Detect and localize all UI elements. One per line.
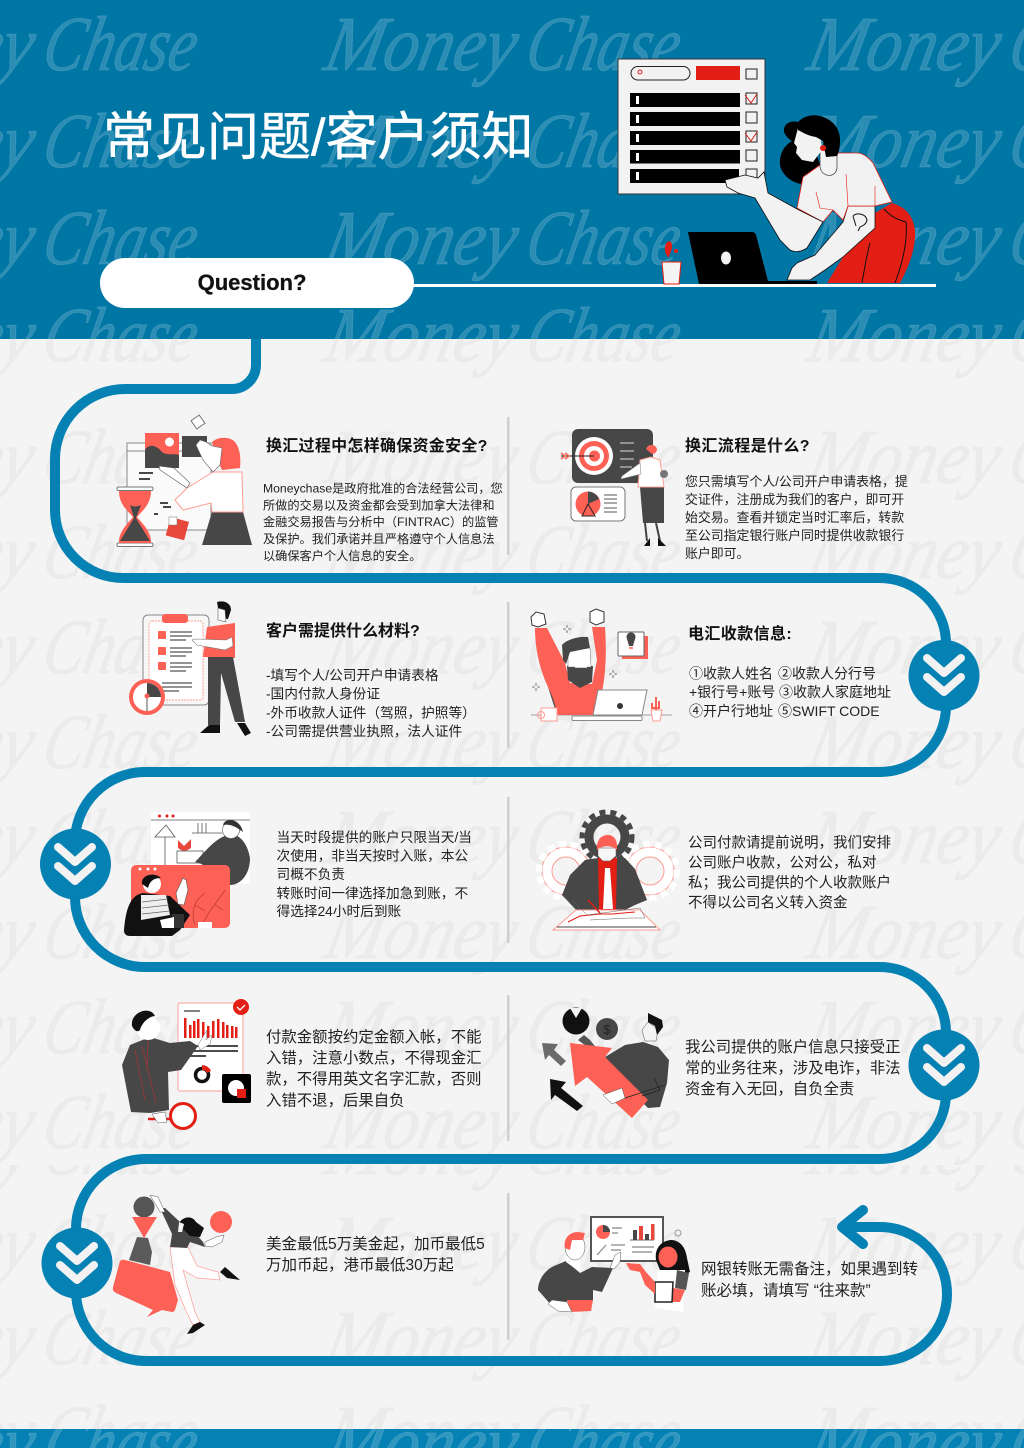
body text: 账户即可。 [685, 546, 749, 561]
body text: -填写个人/公司开户申请表格 [266, 667, 439, 683]
panel: exchange process [561, 429, 908, 561]
illustration: man presenting report with magnifier [122, 999, 251, 1128]
laptop [688, 232, 817, 284]
body text: 网银转账无需备注，如果遇到转 [701, 1260, 918, 1278]
panel: company payment [539, 812, 891, 930]
body text: ③收款人家庭地址 [779, 684, 891, 700]
body text: 交证件，注册成为我们的客户，即可开 [685, 492, 904, 507]
panel: minimum amounts [113, 1195, 485, 1334]
body text: 您只需填写个人/公司开户申请表格，提 [685, 474, 908, 489]
panel: legal business [542, 1008, 900, 1118]
body text: 司概不负责 [276, 867, 345, 882]
winding timeline path [55, 339, 947, 1361]
hair back [780, 121, 820, 184]
panel: same-day account [124, 812, 472, 936]
column dividers [507, 417, 510, 1340]
illustration: target board and presenter [561, 429, 668, 546]
header baseline [410, 284, 936, 287]
body text: +银行号+账号 [689, 684, 775, 700]
body text: -公司需提供营业执照，法人证件 [266, 724, 462, 739]
question pill [100, 258, 414, 308]
body text: -国内付款人身份证 [266, 686, 380, 702]
body text: 所做的交易以及资金都会受到加拿大法律和 [263, 497, 495, 512]
body text: 资金有入无回，自负全责 [685, 1080, 854, 1098]
body text: 付款金额按约定金额入帐，不能 [266, 1028, 481, 1046]
question pill: Question? [198, 270, 306, 295]
checklist board [618, 59, 765, 194]
body text: 私；我公司提供的个人收款账户 [688, 874, 891, 892]
header band [0, 0, 1024, 339]
icon: chevron node right 1 [908, 640, 980, 711]
body text: ⑤SWIFT CODE [778, 703, 880, 719]
illustration: man holding red arrow [542, 1008, 669, 1118]
illustration: cheering bearded man at laptop [531, 609, 672, 721]
face, neck and hair [794, 115, 840, 175]
body text: 始交易。查看并锁定当时汇率后，转款 [685, 510, 904, 525]
title: 常见问题/客户须知 [103, 109, 533, 167]
lower arm with tattoo [787, 206, 875, 280]
body text: ④开户行地址 [689, 703, 773, 719]
body text: Moneychase是政府批准的合法经营公司，您 [263, 481, 503, 496]
body text: -外币收款人证件（驾照，护照等） [266, 704, 476, 720]
panel: online transfer remark [538, 1217, 918, 1312]
body text: 公司付款请提前说明，我们安排 [688, 834, 891, 852]
illustration: manager with gears [539, 812, 677, 930]
body text: 账必填，请填写 “往来款” [701, 1282, 871, 1300]
body text: 次使用，非当天按时入账，本公 [276, 848, 468, 864]
body text: 入错，注意小数点，不得现金汇 [266, 1048, 481, 1067]
cup with splash [662, 241, 681, 284]
heading: 换汇流程是什么? [685, 436, 810, 455]
body text: 美金最低5万美金起，加币最低5 [266, 1235, 485, 1253]
illustration: man holding red arrow: $ [603, 1022, 611, 1037]
illustration: woman with geometric shapes [113, 1195, 240, 1334]
body text: 入错不退，后果自负 [266, 1091, 405, 1109]
icon: chevron node left 2 [42, 1228, 112, 1298]
body text: 当天时段提供的账户只限当天/当 [276, 829, 472, 845]
body text: ①收款人姓名 [689, 665, 773, 681]
body text: 常的业务往来，涉及电诈，非法 [685, 1059, 900, 1077]
upper arm and hand [725, 172, 823, 252]
body text: 不得以公司名义转入资金 [688, 894, 848, 912]
body text: 我公司提供的账户信息只接受正 [685, 1038, 900, 1056]
heading: 电汇收款信息: [688, 624, 792, 643]
body text: 公司账户收款，公对公，私对 [688, 854, 876, 872]
heading: 客户需提供什么材料? [266, 621, 420, 640]
panel: required documents [131, 601, 476, 739]
body text: 得选择24小时后到账 [276, 903, 402, 919]
body text: 转账时间一律选择加急到账，不 [276, 886, 468, 901]
icon: chevron node right 2 [908, 1030, 980, 1100]
header illustration: woman with checklist board [618, 59, 915, 284]
body text: 金融交易报告与分析中（FINTRAC）的监管 [263, 514, 499, 529]
trousers [827, 203, 915, 283]
illustration: two people in browser windows [124, 812, 250, 936]
icon: chevron node left 1 [40, 828, 111, 900]
panel: fund safety [117, 415, 503, 563]
footer band [0, 1429, 1024, 1448]
body text: ②收款人分行号 [778, 665, 876, 681]
illustration: man with clipboard and clock [131, 601, 251, 736]
illustration: woman arranging pictures with hourglass [117, 415, 252, 546]
panel: wire receipt info [531, 609, 891, 721]
icon: return arrow head [842, 1210, 863, 1244]
body text: 万加币起，港币最低30万起 [266, 1256, 454, 1274]
panel: exact amount [122, 999, 481, 1128]
body text: 及保护。我们承诺并且严格遵守个人信息法 [263, 531, 495, 546]
body text: 款，不得用英文名字汇款，否则 [266, 1070, 481, 1088]
heading: 换汇过程中怎样确保资金安全? [266, 436, 488, 455]
illustration: two people with chart board [538, 1217, 690, 1312]
body text: 至公司指定银行账户同时提供收款银行 [685, 528, 904, 543]
blouse [797, 153, 892, 222]
body text: 以确保客户个人信息的安全。 [263, 548, 421, 563]
